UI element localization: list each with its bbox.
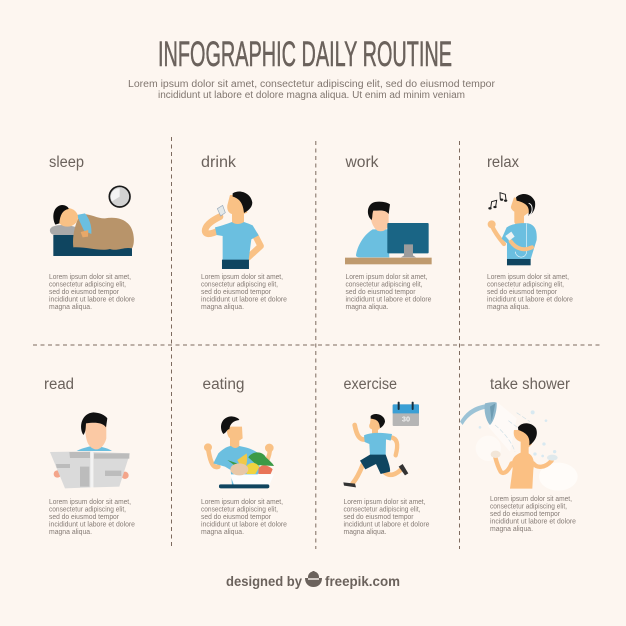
description: take shower: Lorem ipsum dolor sit amet,	[490, 494, 572, 503]
description: relax: incididunt ut labore et dolore	[487, 294, 573, 304]
description: exercise	[344, 497, 430, 536]
description: sleep: incididunt ut labore et dolore	[49, 294, 135, 304]
icon: person drinking water	[205, 191, 261, 269]
description: exercise: sed do eiusmod tempor	[344, 512, 414, 521]
description: read: consectetur adipiscing elit,	[49, 504, 126, 514]
heading: relax: relax	[487, 154, 519, 171]
heading: work: work	[344, 154, 379, 171]
panel: eating	[201, 376, 287, 536]
panel: take shower	[460, 376, 578, 533]
description: relax	[487, 272, 573, 311]
description: drink: sed do eiusmod tempor	[201, 287, 271, 296]
description: take shower: magna aliqua.	[490, 524, 533, 533]
description: take shower: consectetur adipiscing elit,	[490, 502, 567, 510]
description: work: magna aliqua.	[346, 302, 388, 311]
description: sleep: sed do eiusmod tempor	[49, 287, 119, 296]
description: relax: sed do eiusmod tempor	[487, 287, 557, 296]
description: drink	[201, 272, 287, 311]
heading: drink: drink	[201, 154, 236, 171]
footer credit: designed by	[226, 573, 302, 589]
description: drink: Lorem ipsum dolor sit amet,	[201, 272, 283, 281]
panel: exercise	[343, 376, 430, 536]
description: eating: Lorem ipsum dolor sit amet,	[201, 497, 283, 506]
panel: work	[344, 154, 432, 311]
heading: sleep: sleep	[49, 154, 84, 171]
description: eating: magna aliqua.	[201, 527, 244, 536]
description: relax: magna aliqua.	[487, 302, 530, 311]
description: read: sed do eiusmod tempor	[49, 512, 119, 521]
description: eating: sed do eiusmod tempor	[201, 512, 271, 521]
description: take shower: incididunt ut labore et dolore	[490, 516, 576, 526]
description: read: magna aliqua.	[49, 527, 92, 536]
description: eating	[201, 497, 287, 536]
heading: eating: eating	[202, 376, 244, 393]
description: sleep: magna aliqua.	[49, 302, 92, 311]
icon: person showering	[460, 402, 578, 491]
description: drink: incididunt ut labore et dolore	[201, 294, 287, 304]
description: read	[49, 497, 135, 536]
description: exercise: incididunt ut labore et dolore	[344, 520, 430, 528]
description: work: sed do eiusmod tempor	[346, 287, 416, 296]
icon: calendar: 30	[402, 414, 410, 423]
icon: running person with calendar	[343, 402, 419, 487]
description: sleep: consectetur adipiscing elit,	[49, 280, 126, 288]
icon: person reading newspaper	[50, 412, 130, 488]
description: drink: magna aliqua.	[201, 302, 244, 311]
description: read: Lorem ipsum dolor sit amet,	[49, 497, 131, 506]
icon: person at computer	[345, 202, 432, 264]
description: eating: incididunt ut labore et dolore	[201, 520, 287, 528]
panel: sleep	[49, 154, 135, 311]
description: take shower: sed do eiusmod tempor	[490, 509, 560, 518]
icon: sleeping person with clock	[50, 186, 134, 256]
icon: freepik logo	[305, 571, 322, 587]
heading: read: read	[44, 376, 74, 393]
description: exercise: consectetur adipiscing elit,	[344, 504, 420, 514]
heading: exercise: exercise	[344, 376, 397, 393]
description: work	[346, 272, 432, 311]
subtitle	[128, 79, 496, 101]
footer credit	[226, 571, 400, 589]
icon: person listening to music	[488, 193, 537, 265]
footer credit: freepik.com	[325, 573, 400, 589]
subtitle: incididunt ut labore et dolore magna aliqua. Ut enim ad minim veniam	[158, 90, 465, 101]
icon: person with bowl of food	[204, 416, 274, 488]
description: work: consectetur adipiscing elit,	[346, 280, 422, 288]
description: work: incididunt ut labore et dolore	[346, 294, 432, 304]
panel: drink	[201, 154, 287, 311]
description: take shower	[490, 494, 576, 533]
subtitle: Lorem ipsum dolor sit amet, consectetur adipiscing elit, sed do eiusmod tempor	[128, 79, 496, 90]
heading: take shower: take shower	[490, 376, 570, 393]
description: relax: Lorem ipsum dolor sit amet,	[487, 272, 569, 281]
description: exercise: magna aliqua.	[344, 527, 386, 536]
description: read: incididunt ut labore et dolore	[49, 520, 135, 528]
description: eating: consectetur adipiscing elit,	[201, 504, 278, 514]
description: relax: consectetur adipiscing elit,	[487, 280, 564, 288]
description: drink: consectetur adipiscing elit,	[201, 280, 278, 288]
panel: relax	[487, 154, 573, 311]
description: sleep	[49, 272, 135, 311]
description: exercise: Lorem ipsum dolor sit amet,	[344, 497, 426, 506]
panel: read	[44, 376, 135, 536]
description: work: Lorem ipsum dolor sit amet,	[346, 272, 428, 281]
description: sleep: Lorem ipsum dolor sit amet,	[49, 272, 131, 281]
